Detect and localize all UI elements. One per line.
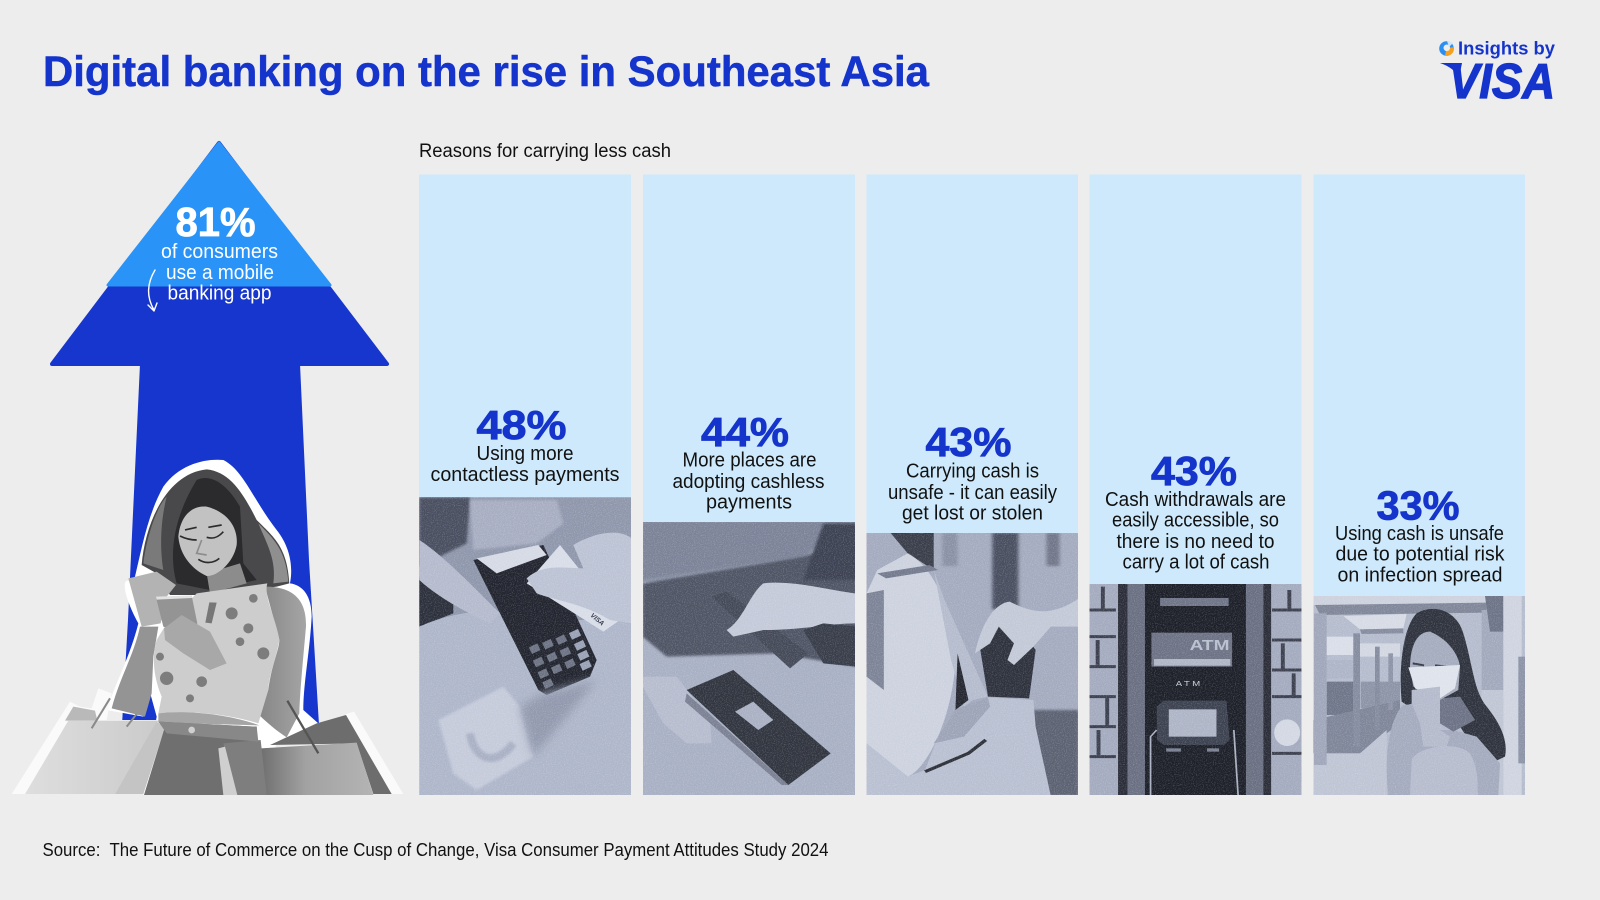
neck <box>207 563 247 593</box>
shopping bag right <box>261 712 403 795</box>
text: using cash is unsafe due to infection risk <box>1335 523 1505 586</box>
midriff <box>158 712 259 725</box>
logo: Insights by Visa <box>1439 38 1556 109</box>
text: using more contactless payments: Using more <box>476 443 574 465</box>
text: mobile app description <box>161 241 278 304</box>
arrow: curved hand-drawn pointer <box>148 270 157 311</box>
stat: 44%: 44% <box>701 409 789 455</box>
title: Digital banking on the rise in Southeast Asia <box>43 48 930 96</box>
source note: Source: The Future of Commerce on the Cusp of Change, Visa Consumer Payment Attitudes Study 2024 <box>42 840 828 860</box>
arrow: dark blue body <box>52 143 387 725</box>
panel: infection risk <box>1313 174 1527 796</box>
photo: woman coughing in a face mask <box>1313 596 1527 796</box>
text: cash withdrawals are easily accessible: easily accessible, so <box>1112 510 1279 532</box>
stat: 43%: 43% <box>926 419 1012 465</box>
stat: 33%: 33% <box>1376 482 1460 528</box>
panel: accessible withdrawals <box>1089 174 1302 796</box>
photo: ATM machine: A T M <box>1176 679 1200 688</box>
face <box>178 507 237 576</box>
jeans <box>144 722 267 795</box>
text: cash withdrawals are easily accessible <box>1105 489 1286 574</box>
stat: 48%: 48% <box>476 402 566 448</box>
panel: contactless payments <box>419 174 637 797</box>
panel: cashless adoption <box>643 174 857 798</box>
text: cash withdrawals are easily accessible: carry a lot of cash <box>1122 552 1270 574</box>
text: using more contactless payments <box>430 443 620 486</box>
panel background <box>419 174 631 498</box>
stat: 81%: 81% <box>176 199 256 245</box>
text: more places are adopting cashless payments: More places are <box>682 450 816 472</box>
illustration: woman with shopping bags <box>12 460 403 795</box>
text: more places are adopting cashless payments: payments <box>706 492 792 514</box>
photo: hand pickpocketing a bag <box>867 533 1079 796</box>
text: using cash is unsafe due to infection risk: Using cash is unsafe <box>1335 523 1504 545</box>
text: using cash is unsafe due to infection risk: on infection spread <box>1338 564 1502 586</box>
text: using more contactless payments: contactless payments <box>430 464 620 486</box>
icon: insights ring <box>1439 41 1454 56</box>
floral top <box>154 583 279 723</box>
card mark: VISA <box>589 612 605 628</box>
stat: 43%: 43% <box>1151 448 1237 494</box>
text: mobile app description: banking app <box>168 282 272 304</box>
panel background <box>643 174 855 522</box>
left arm <box>112 627 158 717</box>
logo wordmark: VISA: VISA <box>1449 55 1555 109</box>
heading: reasons for carrying less cash: Reasons for carrying less cash <box>419 141 671 162</box>
hair <box>142 469 289 595</box>
text: using cash is unsafe due to infection risk: due to potential risk <box>1336 544 1505 566</box>
text: carrying cash is unsafe: unsafe - it can easily <box>888 482 1057 504</box>
text: carrying cash is unsafe: Carrying cash is <box>906 460 1039 482</box>
halo <box>107 460 318 795</box>
text: more places are adopting cashless payments: adopting cashless <box>672 471 824 493</box>
photo: card tap on payment terminal <box>419 497 637 797</box>
photo: QR code phone payment <box>643 522 857 798</box>
text: cash withdrawals are easily accessible: there is no need to <box>1116 531 1274 553</box>
photo grain overlay <box>419 497 1525 795</box>
text: more places are adopting cashless payments <box>672 450 824 514</box>
bag handle <box>287 701 318 753</box>
text: carrying cash is unsafe <box>888 460 1057 524</box>
text: carrying cash is unsafe: get lost or stolen <box>902 502 1043 524</box>
panel: cash safety <box>866 174 1079 796</box>
photo: ATM machine: ATM <box>1190 637 1229 653</box>
photo: ATM machine <box>1089 584 1302 796</box>
hands and phone <box>128 572 227 670</box>
shopping bag left <box>12 688 165 794</box>
text: mobile app description: use a mobile <box>166 262 274 284</box>
panel background <box>1314 174 1525 596</box>
panel: mobile banking arrow <box>12 143 403 795</box>
text: cash withdrawals are easily accessible: Cash withdrawals are <box>1105 489 1286 511</box>
panel background <box>866 174 1078 534</box>
arrow: light blue tip <box>108 143 330 285</box>
text: mobile app description: of consumers <box>161 241 278 263</box>
woman with mask <box>1387 609 1506 795</box>
right shoulder and arm <box>223 587 306 737</box>
panel background <box>1090 174 1302 584</box>
logo text: Insights by: Insights by <box>1458 38 1556 58</box>
